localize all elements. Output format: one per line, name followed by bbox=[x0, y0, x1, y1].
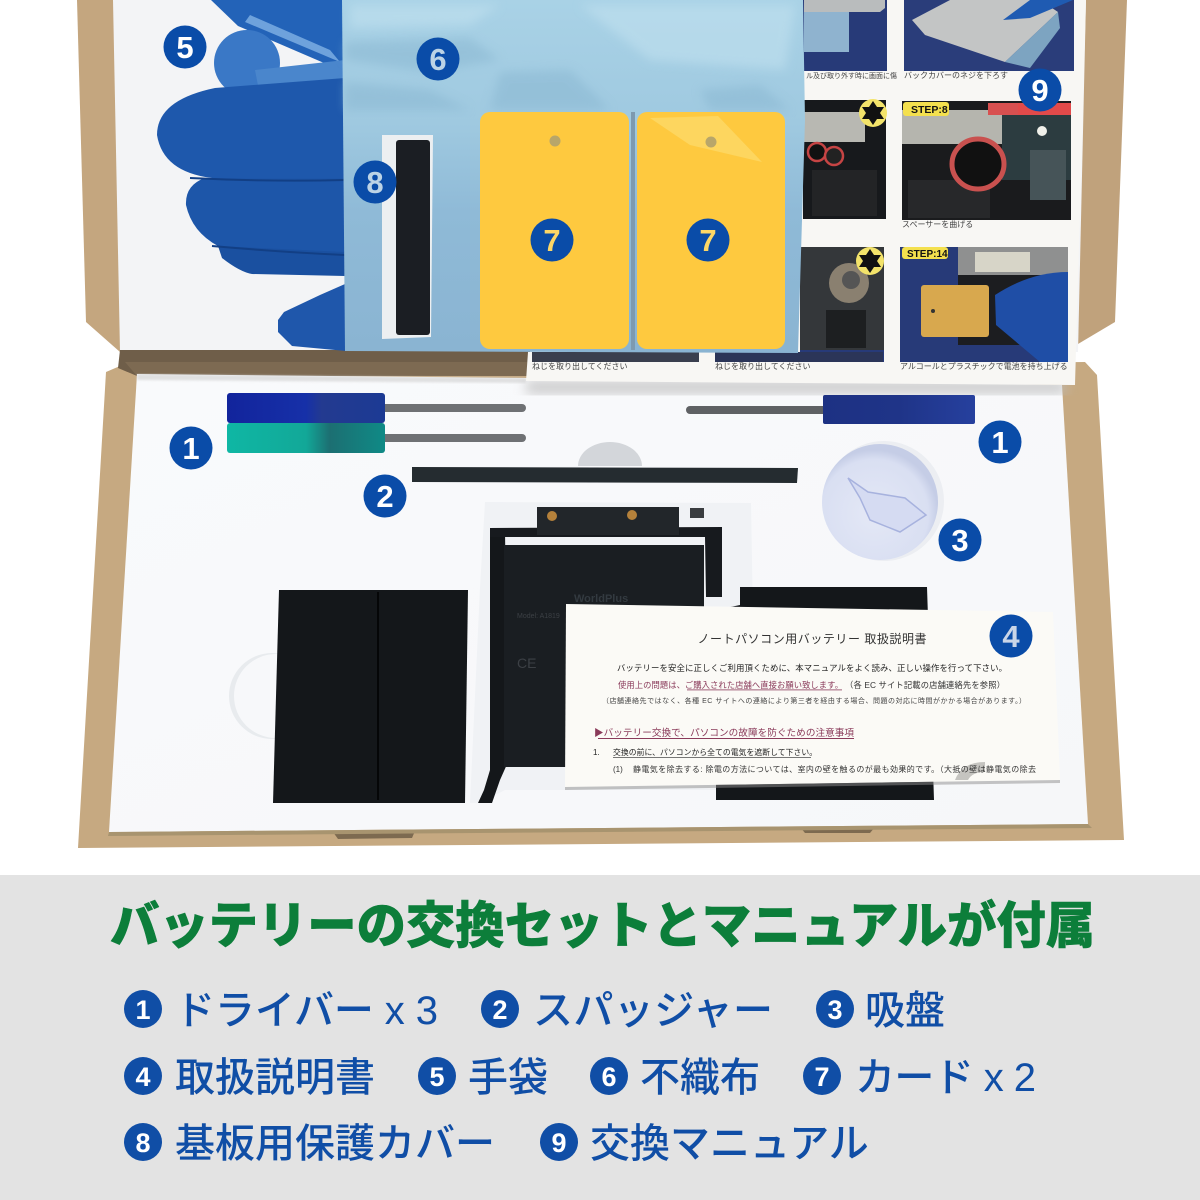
legend item 2: 2 bbox=[492, 995, 508, 1025]
marker 2 bbox=[364, 474, 406, 518]
panel: instruction manual sheet: ▶バッテリー交換で、パソコンの故障を防ぐための注意事項 bbox=[594, 727, 854, 739]
title: バッテリーの交換セットとマニュアルが付属 bbox=[110, 898, 1095, 954]
icon: screwdrivers left bbox=[227, 393, 526, 453]
legend item 5: 手袋 bbox=[468, 1056, 548, 1100]
legend item 8: 8 bbox=[135, 1128, 151, 1158]
legend item 5 bbox=[418, 1056, 548, 1100]
panel: instruction manual sheet: (1) bbox=[613, 765, 623, 774]
manual title: ノートパソコン用バッテリー 取扱説明書 bbox=[698, 631, 926, 646]
marker 1 right: 1 bbox=[991, 425, 1009, 460]
panel: instruction manual sheet: （各 EC サイト記載の店舗連絡先を参照） bbox=[845, 680, 1005, 690]
marker 7 left bbox=[530, 218, 574, 262]
marker 4 bbox=[990, 614, 1032, 658]
marker 8: 8 bbox=[366, 165, 384, 200]
legend item 7: カード x 2 bbox=[855, 1056, 1036, 1100]
marker 3: 3 bbox=[951, 523, 969, 558]
panel: exchange manual bbox=[526, 0, 1086, 385]
legend item 6: 不織布 bbox=[640, 1056, 760, 1100]
marker 1 left: 1 bbox=[182, 431, 200, 466]
panel: instruction manual sheet: （店舗連絡先ではなく、各種 EC サイトへの連絡により第三者を経由する場合、問題の対応に時間がかかる場合があります。） bbox=[602, 696, 1026, 705]
panel: instruction manual sheet: 1. bbox=[593, 748, 600, 757]
panel: foam cut-outs bbox=[229, 442, 756, 803]
marker 9 bbox=[1018, 68, 1062, 112]
panel: exchange manual: アルコールとプラスチックで電池を持ち上げる bbox=[900, 361, 1068, 371]
marker 7 left: 7 bbox=[543, 223, 561, 258]
marker 7 right bbox=[686, 218, 730, 262]
icon: blue gloves bbox=[157, 0, 346, 351]
marker 9: 9 bbox=[1031, 73, 1049, 108]
panel: exchange manual: STEP:14 bbox=[907, 249, 948, 260]
legend item 1: 1 bbox=[135, 995, 151, 1025]
panel: instruction manual sheet: 静電気を除去する: 除電の方法については、室内の壁を触るのが最も効果的です。（大抵の壁は静電気の除去 bbox=[633, 764, 1036, 774]
icon: spudger bbox=[412, 467, 798, 483]
icon: battery: Model: A1819 bbox=[517, 613, 560, 620]
panel: non-woven cloth bbox=[342, 0, 805, 353]
icon: screwdriver right bbox=[686, 395, 975, 424]
legend item 8: 基板用保護カバー bbox=[175, 1122, 495, 1166]
panel: instruction manual sheet: 交換の前に、パソコンから全ての電気を遮断して下さい。 bbox=[613, 747, 817, 757]
icon: battery bbox=[273, 507, 934, 803]
marker 2: 2 bbox=[376, 479, 394, 514]
icon: battery: CE bbox=[517, 655, 536, 671]
panel: instruction manual sheet: 使用上の問題は、ご購入された店舗へ直接お願い致します。 bbox=[618, 680, 843, 690]
panel: exchange manual: ねじを取り出してください bbox=[715, 361, 811, 371]
panel: exchange manual: ル及び取り外す時に画面に傷 bbox=[806, 71, 897, 80]
marker 6: 6 bbox=[429, 42, 447, 77]
marker 5: 5 bbox=[176, 30, 194, 65]
legend item 4: 取扱説明書 bbox=[175, 1056, 375, 1100]
marker 6 bbox=[416, 38, 460, 80]
icon: yellow cards bbox=[480, 112, 785, 349]
icon: battery: WorldPlus bbox=[574, 593, 628, 605]
panel: caption background bbox=[0, 875, 1200, 1200]
legend item 3: 吸盤 bbox=[865, 989, 945, 1033]
marker 4: 4 bbox=[1002, 619, 1020, 654]
legend item 9: 交換マニュアル bbox=[590, 1122, 869, 1166]
legend item 3: 3 bbox=[827, 995, 843, 1025]
legend item 2: スパッジャー bbox=[533, 989, 773, 1033]
panel: instruction manual sheet bbox=[565, 604, 1060, 790]
marker 8 bbox=[354, 160, 396, 204]
panel: exchange manual: STEP:8 bbox=[911, 104, 948, 116]
icon: black circuit-board cover bbox=[382, 135, 433, 339]
marker 7 right: 7 bbox=[699, 223, 717, 258]
panel: box tray bbox=[78, 350, 1124, 848]
legend item 9: 9 bbox=[551, 1128, 567, 1158]
legend item 5: 5 bbox=[429, 1062, 445, 1092]
marker 3 bbox=[938, 518, 982, 562]
legend item 6: 6 bbox=[601, 1062, 617, 1092]
legend item 4: 4 bbox=[135, 1062, 151, 1092]
legend item 3 bbox=[816, 989, 945, 1033]
panel: exchange manual: スペーサーを曲げる bbox=[902, 219, 973, 229]
icon: suction cup bbox=[822, 441, 944, 561]
legend item 1: ドライバー x 3 bbox=[175, 989, 438, 1033]
legend item 7: 7 bbox=[814, 1062, 830, 1092]
panel: instruction manual sheet: バッテリーを安全に正しくご利用頂くために、本マニュアルをよく読み、正しい操作を行って下さい。 bbox=[617, 663, 1007, 673]
marker 1 left bbox=[170, 426, 212, 470]
panel: exchange manual: ねじを取り出してください bbox=[532, 361, 628, 371]
panel: exchange manual: バックカバーのネジを下ろす bbox=[904, 71, 1008, 80]
panel: box lid bbox=[77, 0, 1127, 352]
marker 1 right bbox=[978, 420, 1022, 464]
marker 5 bbox=[164, 26, 206, 68]
